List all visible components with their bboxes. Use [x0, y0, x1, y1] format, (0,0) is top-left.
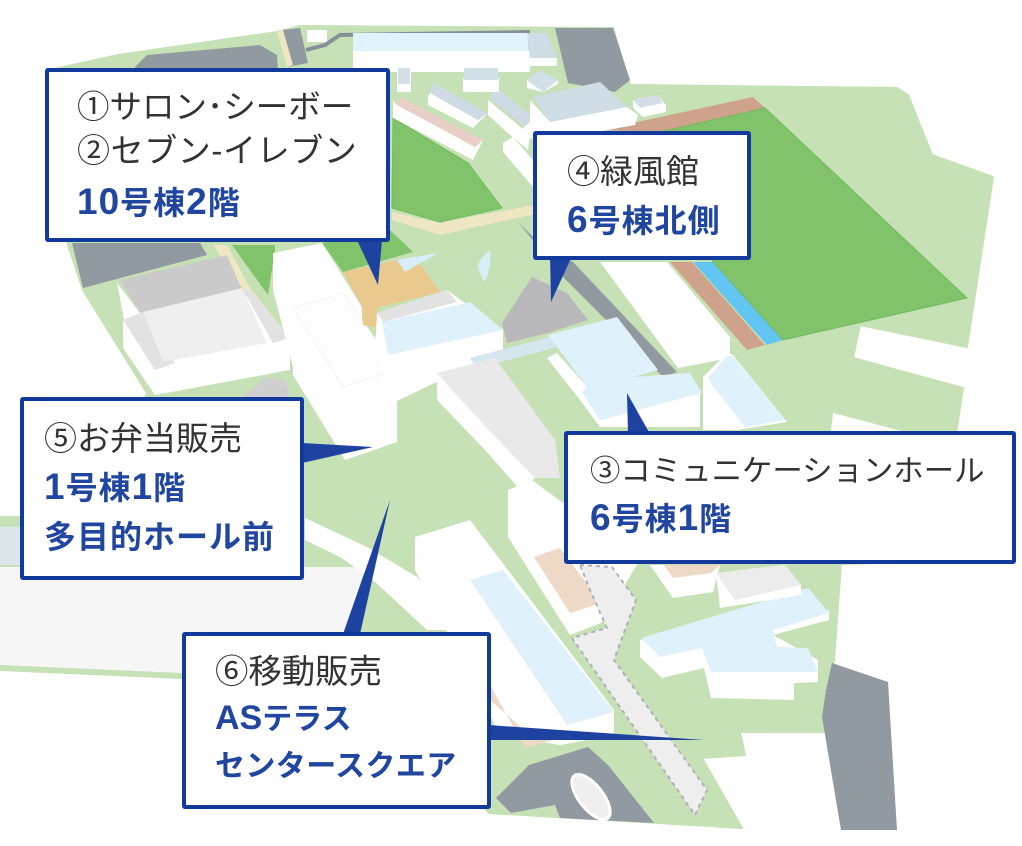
callout: mobile sales: センタースクエア [215, 750, 457, 783]
buildings south [415, 480, 829, 815]
pointer: box 1 [357, 240, 382, 285]
buildings north [353, 33, 666, 187]
callout: bento sales: 1号棟1階 [44, 466, 186, 507]
callout: bento sales: ⑤お弁当販売 [44, 420, 242, 457]
parking island [565, 768, 617, 826]
callout: Communication Hall [564, 431, 1016, 564]
callout: Salon Seaboard and Seven-Eleven: ②セブン-イレブン [77, 132, 357, 169]
callout: mobile sales: ASテラス [215, 699, 352, 737]
callout: mobile sales: ⑥移動販売 [215, 654, 382, 691]
callout: Ryokufukan [533, 131, 751, 260]
buildings center [343, 250, 787, 490]
pointer: box 6 right [488, 725, 704, 740]
parking and roads [72, 28, 897, 830]
callout: Ryokufukan: 6号棟北側 [567, 199, 721, 240]
buildings west [117, 243, 397, 460]
green fields [213, 97, 967, 350]
pointer: box 3 [627, 393, 650, 434]
callout: Ryokufukan: ④緑風館 [567, 153, 699, 190]
callout: Salon Seaboard and Seven-Eleven [45, 68, 390, 242]
callout: Salon Seaboard and Seven-Eleven: 10号棟2階 [77, 181, 241, 222]
callout: Communication Hall: ③コミュニケーションホール [590, 454, 984, 488]
pointer: box 4 [550, 256, 572, 302]
pointer: box 5 [302, 443, 373, 463]
callout: bento sales: 多目的ホール前 [44, 519, 275, 555]
pointer: box 6 [343, 500, 390, 634]
callout: bento sales [20, 397, 304, 580]
callout: Communication Hall: 6号棟1階 [590, 497, 732, 538]
callout: Salon Seaboard and Seven-Eleven: ①サロン･シーボー [77, 89, 353, 125]
callout: mobile sales [182, 632, 491, 809]
